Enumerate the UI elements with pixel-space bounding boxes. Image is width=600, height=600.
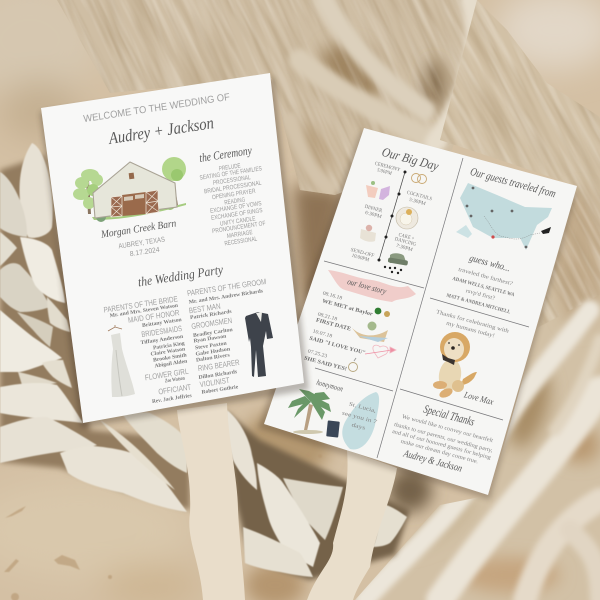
map: United States (456, 183, 552, 250)
guess who block: rsvp'd first? (465, 287, 496, 302)
honeymoon text: St. Lucia, (348, 402, 377, 415)
ceremony order list: BRIDAL PROCESSIONAL (204, 180, 262, 195)
thank you message: and all of our honored guests for helping (391, 428, 492, 461)
heading: guests traveled: Our guests traveled from (469, 166, 557, 200)
venue name and date: AUBREY, TEXAS (118, 234, 166, 251)
heading: the Wedding Party: the Wedding Party (137, 262, 224, 289)
timeline (378, 170, 406, 262)
timeline labels: CAKE + (398, 232, 415, 242)
honeymoon text: see you in 7 (341, 411, 378, 426)
love story timeline: 08.21.18 (317, 312, 338, 323)
wedding party: left column: Patricia King (153, 341, 185, 351)
guess who block: ADAM WELLS, SEATTLE WA (451, 276, 515, 298)
icon: cocktails (366, 181, 390, 200)
ceremony order list: PRONOUNCEMENT OF (212, 220, 266, 235)
timeline labels: COCKTAILS (406, 190, 433, 202)
ceremony order list: PROCESSIONAL (213, 174, 251, 187)
ceremony order list: MARRIAGE (226, 229, 253, 240)
ceremony order list: EXCHANGE OF VOWS (210, 200, 262, 215)
wedding party: right column: BEST MAN (188, 302, 221, 315)
wedding party: left column: FLOWER GIRL (144, 367, 189, 382)
guess who block: MATT & ANDREA MITCHELL (446, 293, 512, 316)
title: couple names: Audrey + Jackson (107, 113, 215, 148)
guess who block: traveled the farthest? (457, 266, 514, 287)
ceremony order list: EXCHANGE OF RINGS (211, 207, 263, 222)
wedding party: right column (187, 277, 267, 396)
heading: the Ceremony: the Ceremony (198, 143, 253, 165)
honeymoon text: days (351, 422, 367, 432)
love story timeline: WE MET at Baylor (321, 298, 374, 318)
ceremony order list: UNITY CANDLE (220, 215, 256, 228)
heading: honeymoon: honeymoon (315, 378, 344, 393)
wedding party: left column: Brooke Smith (153, 352, 187, 364)
wedding party: left column: Abigail Alden (154, 359, 188, 369)
wedding party: left column: Rev. Jack Jeffries (152, 393, 192, 405)
love story timeline: 08.16.18 (322, 291, 343, 302)
wedding party: right column: Robert Guthrie (201, 384, 239, 396)
icon: passport (326, 420, 340, 438)
title: welcome: WELCOME TO THE WEDDING OF (83, 92, 231, 125)
banner: our love story: our love story (346, 276, 388, 296)
icon: engagement ring (348, 358, 358, 372)
icon: dinner plate (396, 207, 418, 229)
thanks from the dog (435, 309, 510, 339)
timeline labels: DINNER (364, 204, 383, 214)
thank you message: thanks to our parents, our wedding party, (393, 422, 494, 454)
left fan handle (177, 403, 245, 600)
tree: left (73, 169, 103, 214)
wedding party: left column: Tiffany Anderson (140, 334, 184, 346)
timeline labels: 5:30PM (408, 197, 427, 207)
ceremony order list: SEATING OF THE FAMILIES (199, 165, 262, 182)
ceremony order list (199, 162, 266, 247)
tree: right (162, 157, 186, 205)
honeymoon text (341, 402, 378, 432)
love story timeline (303, 291, 374, 373)
right fan handle (307, 450, 397, 600)
venue name and date: Morgan Creek Barn (100, 218, 177, 241)
ceremony order list: READING (224, 196, 246, 207)
background: gauze cloth top (57, 0, 477, 195)
guess who block (446, 253, 515, 316)
timeline labels: CEREMONY (374, 161, 401, 173)
panel dividers (315, 158, 529, 458)
barn (93, 162, 177, 218)
wedding party: right column: RING BEARER (197, 358, 240, 373)
icon: wedding cake (360, 225, 376, 242)
thank you message: make our dream day come true. (400, 439, 479, 465)
background: gauze cloth right (340, 0, 600, 600)
wedding party: left column: OFFICIANT (158, 383, 192, 396)
ceremony order list: RECESSIONAL (224, 235, 258, 247)
wedding party: left column: MAID OF HONOR (127, 308, 180, 325)
right card shadow (258, 132, 577, 500)
wedding party: right column: Bradley Carlton (193, 327, 233, 339)
icon: green and gold hearts (375, 308, 390, 317)
stone speckles (4, 452, 322, 600)
heading: Our Big Day: Our Big Day (380, 144, 441, 173)
wedding party: left column: Brittany Watson (142, 317, 182, 329)
timeline labels: 7:30PM (395, 243, 414, 253)
love story timeline: FIRST DATE (315, 318, 352, 333)
wedding party: right column: Dalton Rivers (196, 352, 230, 364)
heading: Special Thanks: Special Thanks (422, 402, 477, 429)
wedding party: right column: VIOLINIST (199, 376, 230, 389)
icon: boat (352, 322, 388, 342)
icon: palm tree (288, 389, 331, 434)
wedding party: right column: Gabe Hudson (195, 346, 231, 358)
wedding party: right column: GROOMSMEN (191, 316, 233, 331)
timeline labels: 10:00PM (351, 253, 370, 263)
wedding party: left column: Mr. and Mrs. Steven Watson (109, 303, 178, 319)
illustration: golden doodle dog (433, 332, 477, 400)
icon: getaway car (384, 253, 408, 274)
timeline labels: DANCING (394, 236, 417, 248)
thanks from the dog: my humans today! (445, 321, 495, 339)
icon: St. Lucia island (342, 392, 379, 449)
illustration: groom tuxedo (245, 312, 273, 377)
venue name and date (100, 218, 177, 258)
timeline labels (350, 161, 433, 263)
timeline labels: 5:00PM (376, 167, 393, 177)
wedding party: left column: PARENTS OF THE BRIDE (103, 294, 178, 315)
signature: Audrey & Jackson: Audrey & Jackson (401, 448, 463, 475)
thanks from the dog: Thanks for celebrating with (435, 309, 510, 335)
love story timeline: 10.07.18 (312, 329, 333, 340)
wedding party: right column: Mr. and Mrs. Andrew Richards (188, 288, 263, 306)
icon: wedding rings (412, 174, 426, 184)
timeline labels: SEND-OFF (350, 247, 375, 259)
wedding party: left column: BRIDESMAIDS (141, 324, 183, 339)
thank you message (391, 413, 494, 465)
timeline labels: 6:30PM (364, 210, 383, 220)
venue name and date: 8.17.2024 (129, 245, 160, 258)
love story timeline: 07.25.23 (307, 349, 328, 360)
left card shadow (40, 78, 309, 428)
panel: left fan card (41, 73, 304, 423)
ceremony order list: OPENING PRAYER (212, 188, 256, 201)
ceremony order list: PRELUDE (218, 162, 241, 173)
background: white dried leaves (0, 143, 410, 580)
illustration: wedding dress (108, 325, 135, 397)
wedding party: left column: Claire Watson (150, 346, 186, 358)
panel: right fan card (264, 128, 577, 495)
banner: our love story (328, 270, 416, 302)
thank you message: We would like to convey our heartfelt (401, 413, 494, 444)
wedding party: right column: PARENTS OF THE GROOM (187, 277, 267, 298)
wedding party: right column: Dillon Richards (198, 369, 238, 381)
wedding party: right column: Steve Paxton (195, 341, 227, 351)
icon: heart and arrow (365, 345, 396, 358)
guess who block: guess who... (468, 253, 512, 274)
wedding party: left column: Zoe Watson (165, 376, 185, 384)
love story timeline: SAID "I LOVE YOU" (308, 336, 366, 356)
love story timeline: SHE SAID YES! (303, 355, 348, 373)
illustration: barn with trees (73, 157, 186, 222)
wedding party: right column: Patrick Richards (190, 309, 232, 321)
wedding party: right column: Ryan Dawson (193, 334, 227, 344)
signature: Love Max: Love Max (462, 389, 495, 407)
wedding party: left column (103, 294, 192, 405)
